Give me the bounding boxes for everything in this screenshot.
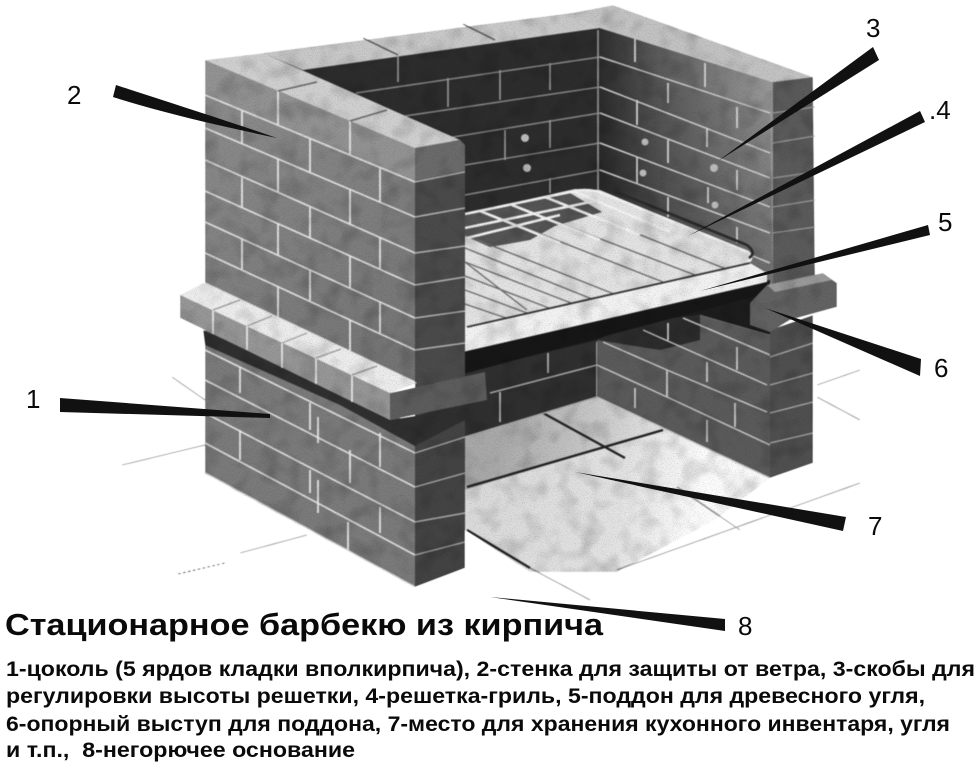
label 7: 7: [868, 511, 882, 541]
legend text block: 1-цоколь (5 ярдов кладки вполкирпича), 2-стенка для защиты от ветра, 3-скобы для: [6, 658, 975, 681]
right wall, upper: [572, 5, 815, 285]
pointer 4: [688, 111, 925, 236]
label 6: 6: [934, 353, 948, 383]
legend text block: 6-опорный выступ для поддона, 7-место для хранения кухонного инвентаря, угля: [6, 713, 950, 736]
label 3: 3: [866, 13, 880, 43]
label 4: .4: [929, 95, 951, 125]
left wall, upper outer face: [205, 53, 465, 395]
icon: bracket bolts on back wall: [521, 134, 531, 172]
left wall cap: [205, 53, 460, 148]
tray light lip: [463, 263, 767, 352]
lower left wall end face: [415, 396, 465, 587]
legend text block: и т.п., 8-негорючее основание: [6, 739, 355, 762]
right pillar: [770, 315, 813, 478]
pointer 1: [60, 398, 270, 418]
title: Стационарное барбекю из кирпича: [5, 607, 604, 642]
label 1: 1: [26, 384, 40, 414]
right support ledge: [750, 273, 837, 332]
pointer 8: [490, 597, 725, 631]
grill dark windows: [465, 193, 602, 247]
back wall, upper: [263, 13, 600, 240]
label 5: 5: [938, 207, 952, 237]
pointer 3: [718, 47, 879, 161]
brick barbecue illustration: [122, 5, 860, 600]
grill and charcoal tray: [463, 189, 767, 374]
pointer 2: [113, 85, 277, 138]
legend text block: [6, 658, 975, 762]
ledge shadow: [203, 330, 465, 446]
floor: non-combustible base: [122, 370, 860, 600]
pointer 6: [765, 308, 921, 376]
right wall end face: [773, 77, 815, 285]
left wall, lower outer face: [203, 330, 465, 587]
pointer 5: [700, 225, 930, 291]
tray dark underside: [463, 282, 767, 374]
pointer 7: [575, 472, 846, 531]
lower right wall: [597, 315, 813, 478]
label 8: 8: [738, 611, 752, 641]
lower back wall: [465, 280, 770, 437]
left support ledge: [180, 283, 487, 420]
legend text block: регулировки высоты решетки, 4-решетка-гриль, 5-поддон для древесного угля,: [6, 685, 925, 708]
label 2: 2: [67, 80, 81, 110]
left wall end face: [415, 140, 465, 395]
icon: bracket bolts on right wall: [640, 138, 718, 208]
